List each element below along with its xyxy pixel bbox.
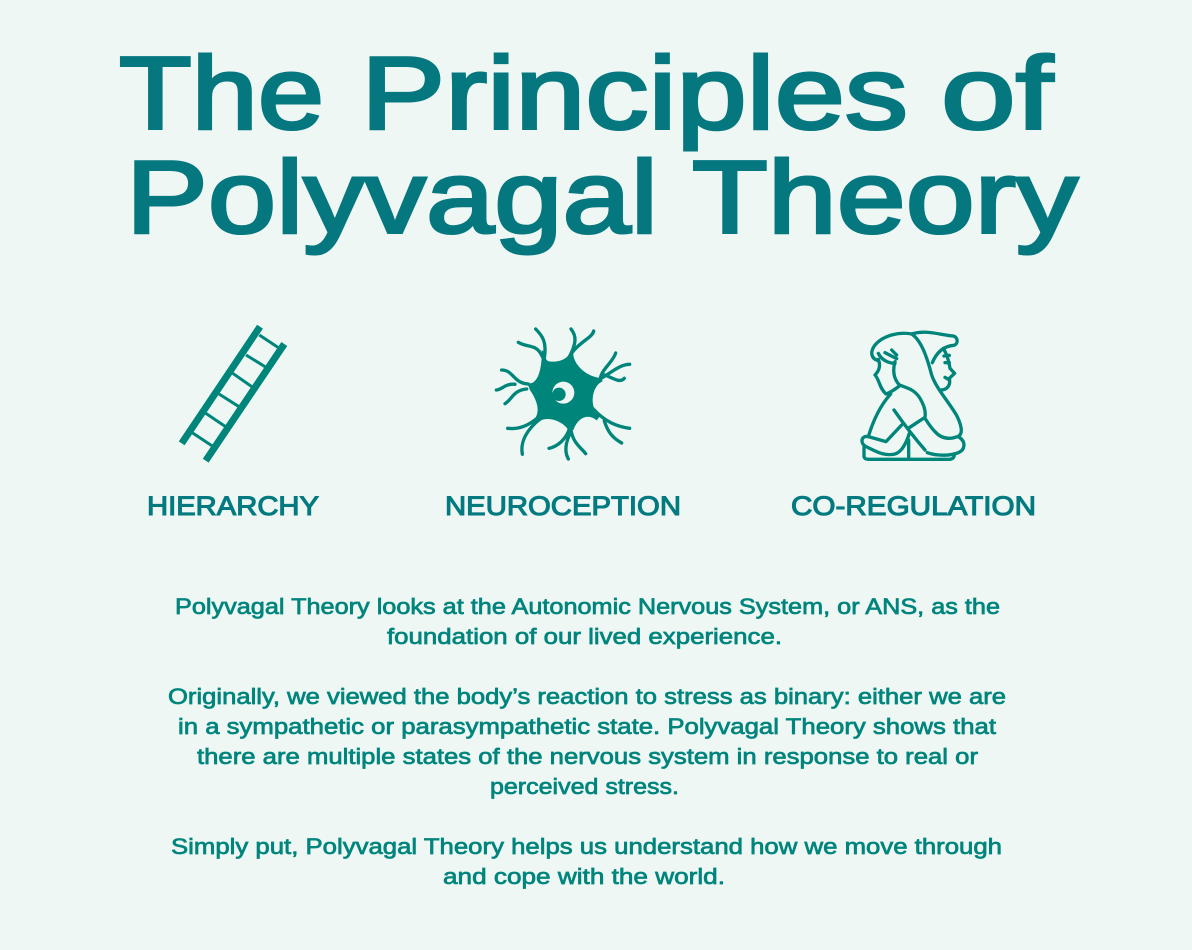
- text block: intro: foundation of our lived experience.: [387, 624, 782, 649]
- title: of: [941, 36, 1053, 150]
- text block: explanation: perceived stress.: [490, 774, 679, 799]
- text block: summary: Simply put, Polyvagal Theory helps us understand how we move through: [171, 834, 1002, 859]
- title: Theory: [692, 140, 1079, 254]
- label: hierarchy: HIERARCHY: [147, 491, 319, 521]
- text block: summary: [171, 834, 1002, 889]
- text block: intro: [175, 594, 1000, 649]
- title: Polyvagal: [126, 140, 658, 254]
- title: [119, 36, 1079, 254]
- label: neuroception: NEUROCEPTION: [445, 491, 681, 521]
- icon: two people hugging: [862, 332, 964, 459]
- icon: neuron: [496, 329, 630, 459]
- text block: intro: Polyvagal Theory looks at the Autonomic Nervous System, or ANS, as the: [175, 594, 1000, 619]
- text block: explanation: Originally, we viewed the body’s reaction to stress as binary: either we are: [168, 684, 1006, 709]
- icon: ladder: [182, 327, 284, 461]
- title: Principles: [361, 36, 908, 150]
- text block: explanation: in a sympathetic or parasympathetic state. Polyvagal Theory shows that: [178, 714, 996, 739]
- text block: summary: and cope with the world.: [443, 864, 725, 889]
- title: The: [119, 36, 324, 150]
- text block: explanation: [168, 684, 1006, 799]
- text block: explanation: there are multiple states of the nervous system in response to real or: [197, 744, 978, 769]
- label: co-regulation: CO-REGULATION: [791, 491, 1036, 521]
